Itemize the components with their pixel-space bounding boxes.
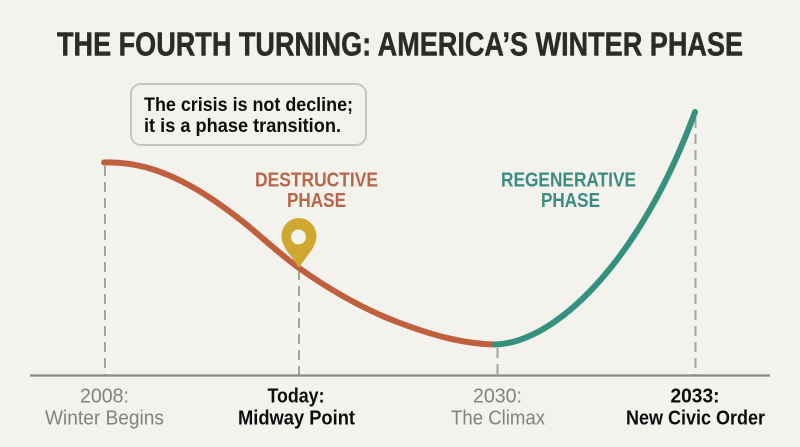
dashed guide lines	[105, 118, 696, 375]
destructive phase label: DESTRUCTIVE	[255, 170, 378, 192]
destructive phase label	[255, 170, 378, 212]
callout: phase transition quote	[131, 84, 366, 145]
label: Today Midway Point	[238, 386, 355, 430]
label: Today Midway Point: Midway Point	[238, 408, 355, 430]
label: 2030 The Climax: The Climax	[451, 408, 545, 430]
timeline axis	[30, 374, 770, 377]
destructive phase curve	[104, 162, 495, 344]
callout: phase transition quote: it is a phase transition.	[144, 115, 341, 137]
destructive phase label: PHASE	[287, 190, 346, 212]
label: 2033 New Civic Order	[626, 386, 765, 430]
icon: location pin marking today	[282, 218, 316, 268]
regenerative phase label: REGENERATIVE	[501, 170, 636, 192]
label: 2008 Winter Begins	[45, 386, 164, 430]
regenerative phase label: PHASE	[541, 190, 600, 212]
regenerative phase curve	[495, 112, 695, 344]
callout: phase transition quote: The crisis is not decline;	[144, 94, 353, 116]
regenerative phase label	[501, 170, 636, 212]
label: 2033 New Civic Order: New Civic Order	[626, 408, 765, 430]
label: Today Midway Point: Today:	[268, 386, 324, 408]
label: 2030 The Climax	[451, 386, 545, 430]
label: 2030 The Climax: 2030:	[473, 386, 522, 408]
label: 2033 New Civic Order: 2033:	[670, 386, 720, 408]
label: 2008 Winter Begins: Winter Begins	[45, 408, 164, 430]
label: 2008 Winter Begins: 2008:	[80, 386, 129, 408]
